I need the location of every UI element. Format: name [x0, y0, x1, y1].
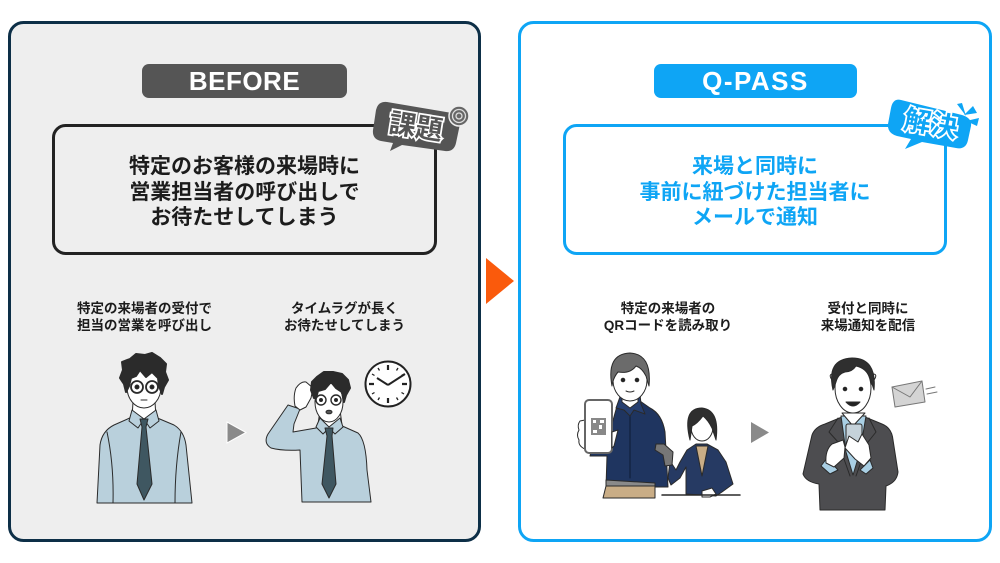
- phone with QR code: [578, 400, 618, 453]
- solution box: [564, 126, 946, 254]
- badge: 解決: [888, 100, 979, 149]
- step text: time lag: お待たせしてしまう: [284, 317, 405, 333]
- illustration: visitor with QR phone and receptionist: [578, 353, 740, 498]
- step text: QR scan: QRコードを読み取り: [604, 317, 732, 333]
- illustration: worried man: [266, 372, 371, 502]
- problem box: お待たせしてしまう: [150, 206, 339, 229]
- problem box: 営業担当者の呼び出しで: [129, 181, 360, 204]
- solution box: メールで通知: [692, 206, 818, 229]
- step text: call sales: 特定の来場者の受付で: [77, 300, 212, 316]
- illustration: businessman with smartphone: [803, 358, 937, 510]
- step text: notification: 受付と同時に: [828, 300, 908, 316]
- step text: QR scan: 特定の来場者の: [621, 300, 715, 316]
- step text: call sales: 担当の営業を呼び出し: [77, 317, 212, 333]
- arrow: q-pass step: [751, 422, 769, 443]
- heading: BEFORE: [142, 64, 347, 98]
- problem box: [54, 126, 436, 254]
- badge: 課題: 課題: [387, 108, 445, 146]
- problem box: 特定のお客様の来場時に: [129, 155, 360, 178]
- step text: call sales: [77, 300, 212, 333]
- step text: notification: [821, 300, 916, 333]
- step text: time lag: [284, 300, 405, 333]
- arrow: before to q-pass: [486, 258, 514, 304]
- solution box: 来場と同時に: [692, 155, 818, 178]
- badge: 課題: [373, 102, 469, 151]
- step text: time lag: タイムラグが長く: [291, 300, 398, 316]
- illustration: man with glasses: [97, 353, 192, 503]
- badge: 解決: 解決: [902, 105, 960, 143]
- envelope icon: [892, 381, 937, 407]
- arrow: before step: [227, 422, 246, 443]
- heading: Q-PASS: Q-PASS: [702, 66, 809, 96]
- panel: before: [10, 22, 480, 540]
- solution box: 事前に紐づけた担当者に: [640, 180, 870, 204]
- step text: QR scan: [604, 300, 732, 333]
- heading: BEFORE: BEFORE: [189, 66, 300, 96]
- icon: clock: [366, 362, 410, 406]
- step text: notification: 来場通知を配信: [821, 317, 916, 333]
- heading: Q-PASS: [654, 64, 857, 98]
- receptionist: [655, 408, 740, 497]
- visitor: [590, 353, 668, 498]
- panel: q-pass: [520, 22, 990, 540]
